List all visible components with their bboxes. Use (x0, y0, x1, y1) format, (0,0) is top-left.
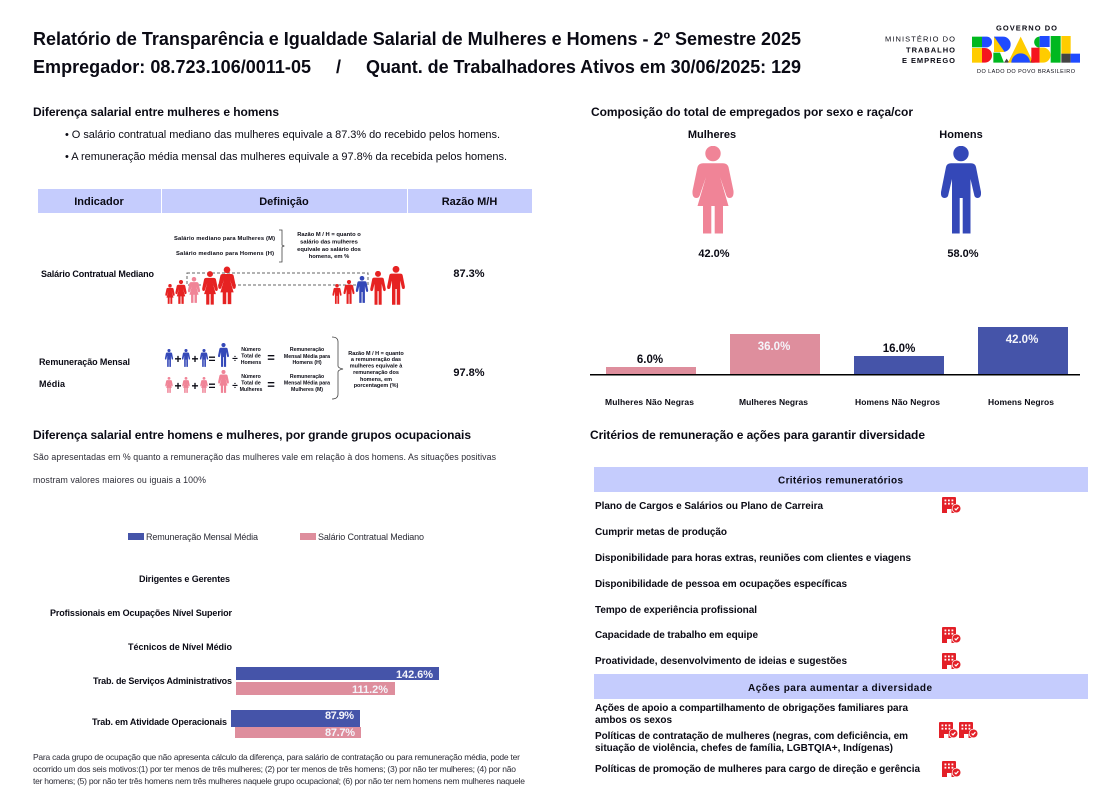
diagram: remuneração média: ÷ (232, 381, 238, 392)
bar chart: grupos ocupacionais: 111.2% (352, 684, 388, 696)
diagram: salário mediano: Salário mediano para Mulheres (M) (174, 236, 275, 242)
men figure and share: 58.0% (947, 248, 979, 260)
bar chart: grupos ocupacionais (50, 574, 439, 739)
heading: critérios: Critérios de remuneração e ações para garantir diversidade (590, 428, 925, 442)
women figure and share: 42.0% (698, 248, 730, 260)
list: critérios (595, 501, 911, 667)
diagram: remuneração média: remuneração dos (353, 370, 399, 376)
diagram: remuneração média: + (174, 352, 182, 366)
column chart: sexo e raça: Homens Não Negros (855, 397, 940, 407)
icon: empresa com check (939, 722, 958, 738)
list: ações: Ações de apoio a compartilhamento de obrigações familiares para (595, 703, 908, 714)
diagram: remuneração média: Número (241, 374, 261, 380)
men figure and share (939, 129, 983, 260)
diagram: remuneração média: Razão M / H = quanto (348, 351, 404, 357)
list: ações: Políticas de contratação de mulheres (negras, com deficiência, em (595, 731, 908, 742)
value: 97.8%: 97.8% (453, 367, 485, 379)
list: critérios: Tempo de experiência profissional (595, 605, 757, 616)
diagram: remuneração média: + (191, 352, 199, 366)
bullet: salário contratual: • O salário contratual mediano das mulheres equivale a 87.3% do recebido pelos homens. (65, 129, 500, 141)
list: critérios: Capacidade de trabalho em equipe (595, 630, 758, 641)
title: Quant. de Trabalhadores Ativos em 30/06/2025: 129 (366, 57, 801, 77)
footnote: Para cada grupo de ocupação que não apresenta cálculo da diferença, para salário de contratação ou para remuneração média, pode ter (33, 752, 520, 762)
bar chart: grupos ocupacionais: Técnicos de Nível Médio (128, 642, 232, 652)
column chart: sexo e raça: Homens Negros (988, 397, 1054, 407)
list: ações (595, 703, 920, 775)
diagram: salário mediano: equivale ao salário dos (297, 247, 361, 253)
title (33, 29, 801, 77)
description (33, 452, 497, 485)
bar chart: grupos ocupacionais: Profissionais em Ocupações Nível Superior (50, 608, 232, 618)
diagram: remuneração média: + (174, 379, 182, 393)
diagram: remuneração média: = (208, 352, 216, 366)
diagram: remuneração média: Homens (241, 360, 261, 366)
diagram: remuneração média: mulheres equivale à (350, 364, 403, 370)
table header: Definição (259, 196, 309, 208)
footnote: ocorrido um dos seis motivos:(1) por ter menos de três mulheres; (2) por ter menos de três homens; (3) por não ter mulheres; (4) por não (33, 764, 516, 774)
diagram: remuneração média: = (267, 377, 275, 392)
diagram: remuneração média: porcentagem (%) (354, 383, 398, 389)
diagram: remuneração média: Mulheres (240, 387, 262, 393)
diagram: remuneração média: Número (241, 347, 261, 353)
diagram: remuneração média: Mensal Média para (284, 354, 330, 360)
bar chart: grupos ocupacionais: 142.6% (396, 669, 433, 681)
legend: Salário Contratual Mediano (318, 532, 424, 542)
diagram: remuneração média (165, 337, 404, 399)
list: critérios: Cumprir metas de produção (595, 527, 727, 538)
diagram: remuneração média: + (191, 379, 199, 393)
bar chart: grupos ocupacionais: Trab. de Serviços Administrativos (93, 676, 232, 686)
logo: Governo do Brasil: DO LADO DO POVO BRASILEIRO (977, 69, 1076, 75)
diagram: salário mediano: homens, em % (309, 254, 349, 260)
table header (38, 189, 532, 213)
title: Empregador: 08.723.106/0011-05 (33, 57, 311, 77)
diagram: salário mediano (165, 230, 405, 305)
band: critérios remuneratórios (594, 467, 1088, 492)
title: / (336, 57, 341, 77)
list: ações: ambos os sexos (595, 715, 672, 726)
description: São apresentadas em % quanto a remuneração das mulheres vale em relação à dos homens. As situações positivas (33, 452, 497, 462)
legend: Remuneração Mensal Média (146, 532, 258, 542)
row label: remuneração mensal média: Média (39, 379, 66, 389)
women figure and share: Mulheres (688, 129, 736, 141)
column chart: sexo e raça: 42.0% (1006, 334, 1038, 346)
row label: remuneração mensal média: Remuneração Mensal (39, 357, 130, 367)
diagram: remuneração média: Remuneração (290, 347, 324, 353)
women figure and share (688, 129, 736, 260)
title: Relatório de Transparência e Igualdade Salarial de Mulheres e Homens - 2º Semestre 2025 (33, 29, 801, 49)
panel: critérios e ações (590, 428, 1088, 777)
list: critérios: Proatividade, desenvolvimento de ideias e sugestões (595, 656, 847, 667)
diagram: salário mediano: Salário mediano para Homens (H) (176, 251, 274, 257)
column chart: sexo e raça: Mulheres Não Negras (605, 397, 694, 407)
icon: empresa com check (942, 653, 961, 669)
column chart: sexo e raça: 36.0% (758, 341, 790, 353)
band: ações: Ações para aumentar a diversidade (748, 683, 932, 694)
panel: grandes grupos ocupacionais (33, 428, 525, 786)
description: mostram valores maiores ou iguais a 100% (33, 475, 206, 485)
bar chart: grupos ocupacionais: 87.9% (325, 710, 354, 722)
bullet: remuneração média: • A remuneração média mensal das mulheres equivale a 97.8% da recebida pelos homens. (65, 151, 507, 163)
diagram: remuneração média: Remuneração (290, 374, 324, 380)
panel: diferença salarial (33, 105, 532, 399)
diagram: salário mediano: salário das mulheres (300, 240, 358, 246)
legend (128, 532, 424, 542)
bar chart: grupos ocupacionais: Trab. em Atividade Operacionais (92, 717, 227, 727)
diagram: salário mediano: Razão M / H = quanto o (297, 232, 361, 238)
icon: empresa com check (959, 722, 978, 738)
list: critérios: Plano de Cargos e Salários ou Plano de Carreira (595, 501, 823, 512)
footnote (33, 752, 525, 786)
logo: Governo do Brasil (972, 24, 1080, 75)
icon: empresa com check (942, 497, 961, 513)
diagram: remuneração média: = (267, 350, 275, 365)
table header: Razão M/H (442, 196, 497, 208)
list: ações: Políticas de promoção de mulheres para cargo de direção e gerência (595, 764, 920, 775)
column chart: sexo e raça: 6.0% (637, 354, 663, 366)
diagram: remuneração média: Total de (241, 354, 261, 360)
band: ações (594, 674, 1088, 699)
panel: composição por sexo e raça (590, 105, 1080, 407)
column chart: sexo e raça (590, 327, 1080, 407)
diagram: remuneração média: Homens (H) (292, 360, 322, 366)
diagram: remuneração média: Mensal Média para (284, 380, 330, 386)
list: ações: situação de violência, chefes de família, LGBTQIA+, Indígenas) (595, 743, 893, 754)
diagram: remuneração média: homens, em (360, 377, 392, 383)
diagram: remuneração média: = (208, 379, 216, 393)
heading: diferença salarial: Diferença salarial entre mulheres e homens (33, 105, 279, 119)
logo: Governo do Brasil: GOVERNO DO (996, 24, 1057, 32)
bar chart: grupos ocupacionais: 87.7% (325, 727, 355, 739)
men figure and share: Homens (939, 129, 983, 141)
heading: composição: Composição do total de empregados por sexo e raça/cor (591, 105, 913, 119)
icon: empresa com check (942, 761, 961, 777)
row label: remuneração mensal média (39, 357, 130, 389)
logo: Ministério do Trabalho e Emprego: E EMPREGO (902, 56, 955, 65)
row label: salário contratual mediano: Salário Contratual Mediano (41, 269, 154, 279)
logo: Ministério do Trabalho e Emprego (885, 34, 955, 65)
column chart: sexo e raça: 16.0% (883, 343, 915, 355)
icon: empresa com check (942, 627, 961, 643)
diagram: remuneração média: ÷ (232, 354, 238, 365)
table header: Indicador (74, 196, 124, 208)
list: critérios: Disponibilidade de pessoa em ocupações específicas (595, 579, 847, 590)
diagram: remuneração média: Total de (241, 380, 261, 386)
diagram: remuneração média: Mulheres (M) (291, 387, 323, 393)
logo: Ministério do Trabalho e Emprego: MINISTÉRIO DO (885, 34, 955, 44)
column chart: sexo e raça: Mulheres Negras (739, 397, 808, 407)
heading: grupos ocupacionais: Diferença salarial entre homens e mulheres, por grande grupos ocupacionais (33, 428, 471, 442)
diagram: remuneração média: a remuneração das (351, 357, 401, 363)
bar chart: grupos ocupacionais: Dirigentes e Gerentes (139, 574, 230, 584)
footnote: ter homens; (5) por não ter três homens nem três mulheres naquele grupo ocupacional; (6) por não ter nem homens nem mulheres naquele (33, 776, 525, 786)
value: 87.3%: 87.3% (453, 268, 485, 280)
logo: Ministério do Trabalho e Emprego: TRABALHO (906, 46, 955, 54)
list: critérios: Disponibilidade para horas extras, reuniões com clientes e viagens (595, 553, 911, 564)
band: critérios remuneratórios: Critérios remuneratórios (778, 476, 903, 486)
